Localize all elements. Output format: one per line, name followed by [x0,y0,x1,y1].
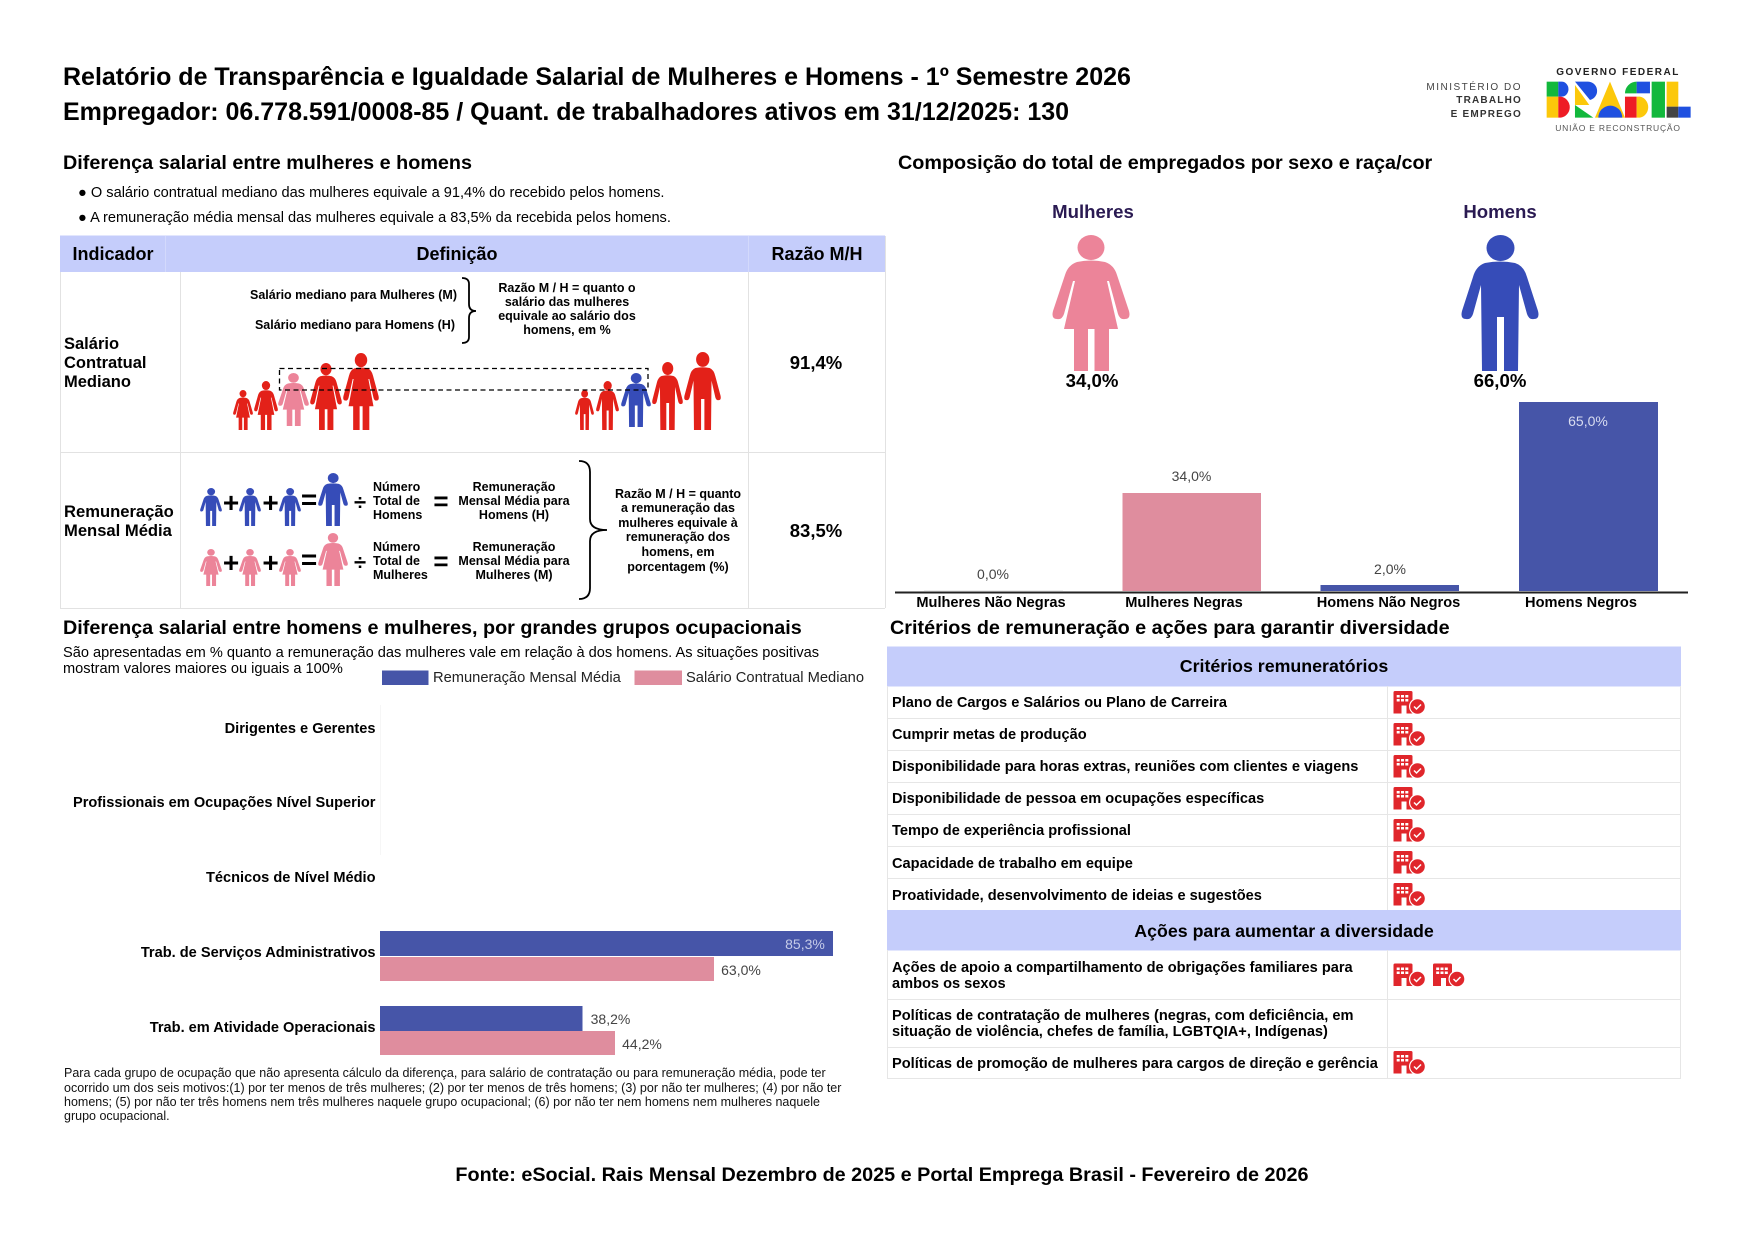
definição: textos do salário mediano: Salário mediano para Homens (H) [255,318,455,332]
icon: fila de mulheres [233,353,379,430]
logo: ministério e governo federal: GOVERNO FEDERAL [1556,67,1680,78]
table header: Razão M/H [771,244,863,264]
fórmula: homens: + [223,487,239,518]
panel: tabela de indicadores [60,236,886,608]
panel: mulheres 34,0%: Mulheres [1052,201,1134,222]
lista de ações: Ações de apoio a compartilhamento de obrigações familiares para [892,960,1354,976]
fórmula: mulheres: Número [373,540,421,554]
fórmula: homens: Total de [373,494,420,508]
fórmula: mulheres: + [262,547,279,578]
indicador: remuneração mensal média: Mensal Média [64,521,173,540]
fórmula: mulheres: Mensal Média para [458,554,571,568]
fórmula: homens: Remuneração [473,480,556,494]
lista de ações: Políticas de contratação de mulheres (negras, com deficiência, em [892,1008,1354,1024]
bar chart: grupos ocupacionais: Dirigentes e Gerentes [225,721,376,737]
lista de critérios: Disponibilidade para horas extras, reuniões com clientes e viagens [892,759,1358,775]
logo: ministério e governo federal: E EMPREGO [1451,109,1522,120]
definição: textos do salário mediano [250,278,636,343]
bar chart: raça/cor: Mulheres Negras [1125,595,1243,611]
bar chart: grupos ocupacionais: Técnicos de Nível Médio [206,870,376,886]
heading: diferença salarial: Diferença salarial entre mulheres e homens [63,152,472,174]
fórmula: mulheres: = [301,544,317,575]
bar chart: grupos ocupacionais: Trab. de Serviços Administrativos [141,945,376,961]
fórmula: homens: Mensal Média para [458,494,571,508]
title: Empregador: 06.778.591/0008-85 / Quant. de trabalhadores ativos em 31/12/2025: 130 [63,98,1069,126]
lista de critérios: Tempo de experiência profissional [892,823,1131,839]
chave e definição da razão: a remuneração das [621,501,735,515]
descrição do gráfico: São apresentadas em % quanto a remuneração das mulheres vale em relação à dos homens. As situações positivas [63,645,819,661]
indicador: salário contratual mediano: Contratual [64,354,146,372]
panel: tabela de critérios [887,646,1681,1078]
logo: ministério e governo federal: TRABALHO [1456,95,1522,106]
chave e definição da razão: remuneração dos [626,530,730,544]
lista de critérios: Disponibilidade de pessoa em ocupações específicas [892,791,1264,807]
chave e definição da razão: homens, em [642,545,714,559]
bar chart: grupos ocupacionais [73,705,833,1055]
fórmula: mulheres: = [433,546,449,576]
definição: textos do salário mediano: Salário mediano para Mulheres (M) [250,288,457,302]
heading: critérios de remuneração: Critérios de remuneração e ações para garantir diversidade [890,617,1450,639]
nota de rodapé do gráfico: Para cada grupo de ocupação que não apresenta cálculo da diferença, para salário de contratação ou para remuneração média, pode ter [64,1066,826,1080]
logo: ministério e governo federal: MINISTÉRIO DO [1426,80,1522,93]
panel: homens 66,0% [1462,201,1538,391]
bar chart: raça/cor: 0,0% [977,566,1009,582]
chave e definição da razão: Razão M / H = quanto [615,487,741,501]
valor: 83,5%: 83,5% [790,520,842,541]
table header: Definição [416,244,498,264]
chave e definição da razão: porcentagem (%) [627,560,729,574]
fonte: Fonte: eSocial. Rais Mensal Dezembro de 2025 e Portal Emprega Brasil - Fevereiro de 2026 [455,1164,1309,1186]
fórmula: mulheres: Mulheres [373,568,428,582]
bar chart: raça/cor: 2,0% [1374,561,1406,577]
lista de critérios: Cumprir metas de produção [892,727,1087,743]
bar chart: raça/cor: 65,0% [1568,413,1608,429]
chave e definição da razão: mulheres equivale à [618,516,738,530]
heading: composição: Composição do total de empregados por sexo e raça/cor [898,152,1433,174]
bar chart: grupos ocupacionais: 38,2% [591,1011,630,1027]
indicador: remuneração mensal média: Remuneração [64,502,174,521]
lista de ações [892,960,1379,1072]
chave e definição da razão [579,461,741,599]
fórmula: mulheres [200,533,571,586]
valor: 91,4%: 91,4% [790,352,842,373]
panel: homens 66,0%: 66,0% [1474,370,1527,391]
icons: empresas nas ações [1394,964,1466,1075]
indicador: salário contratual mediano: Mediano [64,373,131,391]
bar chart: raça/cor: Homens Não Negros [1317,595,1460,611]
table header [72,244,863,264]
bar chart: grupos ocupacionais: 63,0% [721,962,761,978]
legend [382,670,864,686]
bar chart: raça/cor: Homens Negros [1525,595,1637,611]
bullets: resumo [78,185,671,226]
fórmula: homens: = [301,484,317,515]
lista de ações: situação de violência, chefes de família, LGBTQIA+, Indígenas) [892,1024,1328,1040]
indicador: remuneração mensal média [64,502,174,540]
fórmula: homens: Homens [373,508,422,522]
bar chart: grupos ocupacionais: 44,2% [622,1036,662,1052]
title: Relatório de Transparência e Igualdade Salarial de Mulheres e Homens - 1º Semestre 2026 [63,63,1131,91]
fórmula: homens: + [262,487,279,518]
descrição do gráfico: mostram valores maiores ou iguais a 100% [63,661,343,677]
bar chart: raça/cor [895,402,1688,611]
fórmula: mulheres: Remuneração [473,540,556,554]
lista de ações: ambos os sexos [892,976,1006,992]
nota de rodapé do gráfico [64,1066,841,1123]
fórmula: homens: ÷ [354,490,366,515]
lista de critérios: Capacidade de trabalho em equipe [892,856,1133,872]
nota de rodapé do gráfico: ocorrido um dos seis motivos:(1) por ter menos de três mulheres; (2) por ter menos de três homens; (3) por não ter mulheres; (4) por não ter [64,1081,841,1095]
logo: ministério e governo federal: UNIÃO E RECONSTRUÇÃO [1555,123,1681,133]
icons: empresas nos critérios [1394,691,1426,907]
table header: Indicador [72,244,154,264]
fórmula: homens: Homens (H) [479,508,549,522]
indicador: salário contratual mediano: Salário [64,335,119,353]
heading: diferença por grupos ocupacionais: Diferença salarial entre homens e mulheres, por grandes grupos ocupacionais [63,617,802,639]
definição: textos do salário mediano: salário das mulheres [505,295,629,309]
logo: ministério e governo federal [1426,67,1691,133]
bar chart: grupos ocupacionais: Profissionais em Ocupações Nível Superior [73,795,376,811]
bar chart: raça/cor: Mulheres Não Negras [916,595,1066,611]
bar chart: raça/cor: 34,0% [1172,468,1211,484]
legend: Remuneração Mensal Média [433,670,622,686]
destaque tracejado da mediana [280,368,648,390]
lista de critérios: Plano de Cargos e Salários ou Plano de Carreira [892,695,1228,711]
header: ações para diversidade: Ações para aumentar a diversidade [1134,921,1434,941]
nota de rodapé do gráfico: grupo ocupacional. [64,1109,170,1123]
panel: mulheres 34,0%: 34,0% [1066,370,1119,391]
panel: mulheres 34,0% [1052,201,1134,391]
bullets: resumo: ● A remuneração média mensal das mulheres equivale a 83,5% da recebida pelos homens. [78,210,671,226]
indicador: salário contratual mediano [64,335,146,391]
header: critérios remuneratórios: Critérios remuneratórios [1180,656,1388,676]
lista de ações: Políticas de promoção de mulheres para cargos de direção e gerência [892,1056,1379,1072]
nota de rodapé do gráfico: homens; (5) por não ter três homens nem três mulheres naquele grupo ocupacional; (6) por não ter nem homens nem mulheres naquele [64,1095,820,1109]
fórmula: homens: Número [373,480,421,494]
bar chart: grupos ocupacionais: 85,3% [785,936,825,952]
fórmula: mulheres: + [223,547,239,578]
definição: textos do salário mediano: Razão M / H = quanto o [498,281,636,295]
definição: textos do salário mediano: homens, em % [523,323,611,337]
legend: Salário Contratual Mediano [686,670,864,686]
panel: homens 66,0%: Homens [1463,201,1537,222]
definição: textos do salário mediano: equivale ao salário dos [498,309,636,323]
descrição do gráfico [63,645,819,677]
fórmula: mulheres: Total de [373,554,420,568]
fórmula: homens [200,473,571,526]
fórmula: mulheres: ÷ [354,550,366,575]
title [63,63,1131,126]
icon: fila de homens [575,352,721,430]
fórmula: mulheres: Mulheres (M) [475,568,553,582]
lista de critérios [892,695,1358,904]
bullets: resumo: ● O salário contratual mediano das mulheres equivale a 91,4% do recebido pelos homens. [78,185,664,201]
lista de critérios: Proatividade, desenvolvimento de ideias e sugestões [892,888,1262,904]
fórmula: homens: = [433,486,449,516]
bar chart: grupos ocupacionais: Trab. em Atividade Operacionais [150,1020,376,1036]
